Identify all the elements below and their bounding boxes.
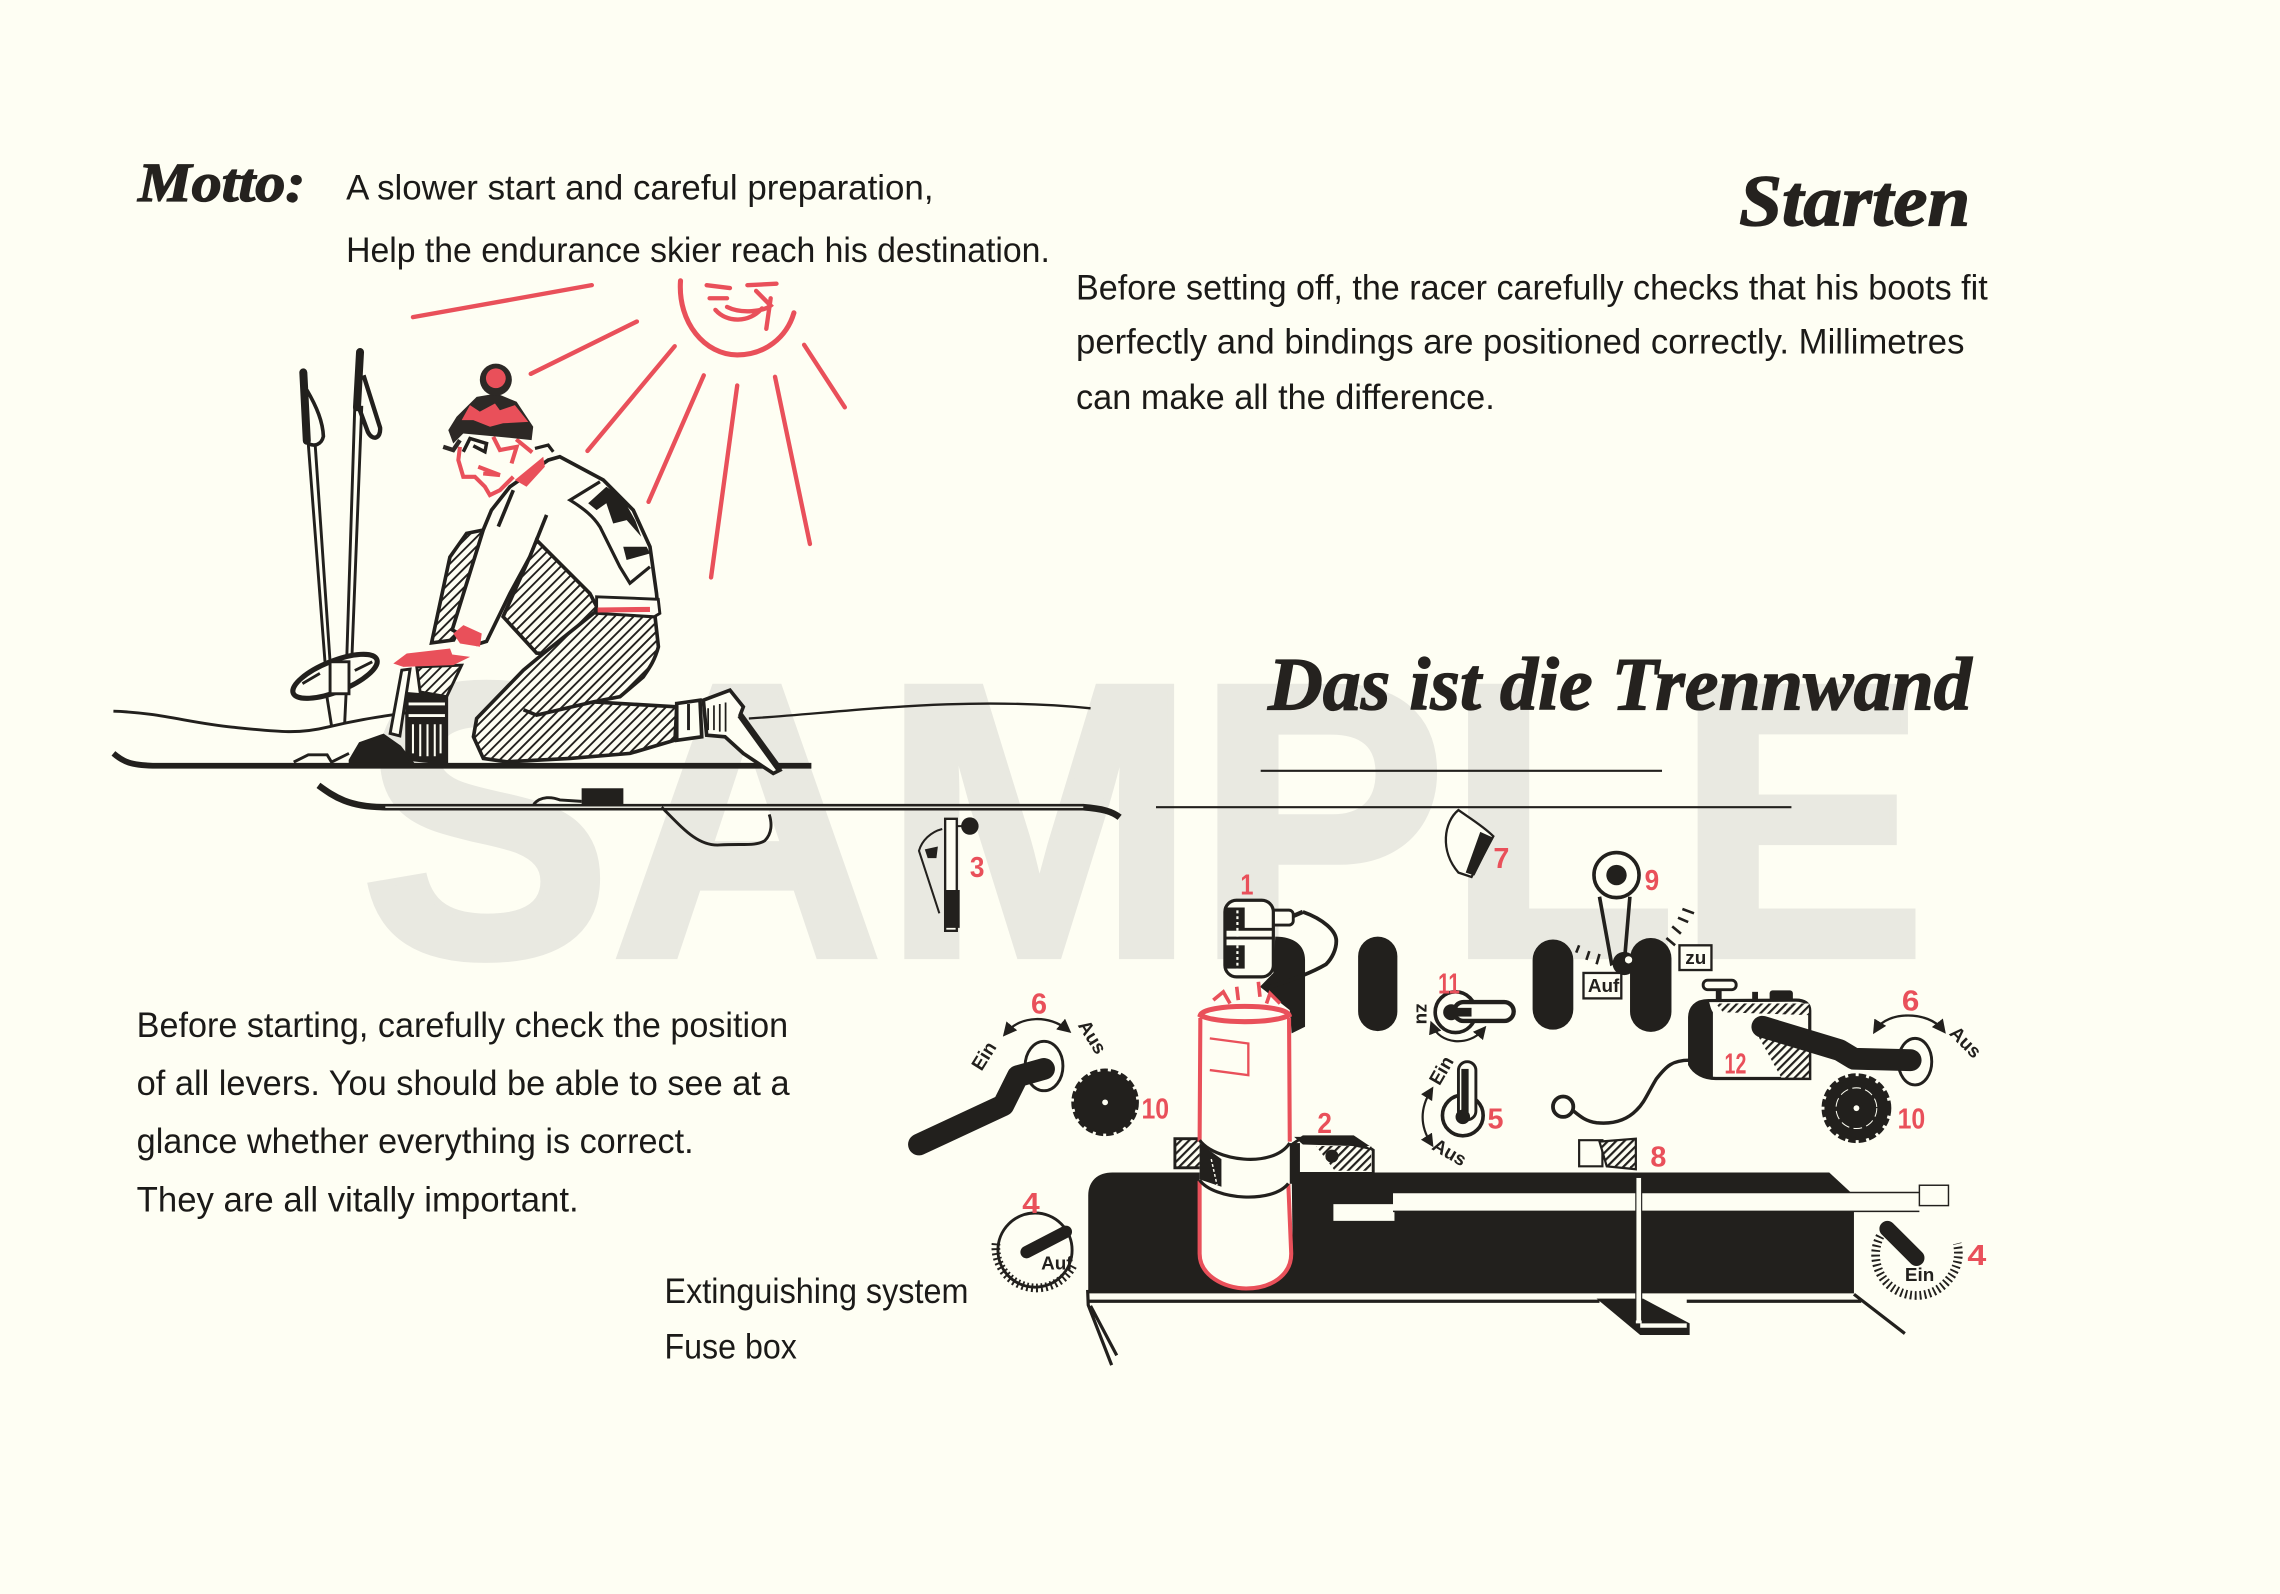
item 8: hinge: 8 xyxy=(1650,1141,1666,1173)
heading: Motto: Motto: xyxy=(137,152,305,213)
item 9: damper lever: zu xyxy=(1685,948,1706,969)
item 12: fuel tank xyxy=(1553,980,1810,1123)
item 4 right: dial xyxy=(1876,1215,1987,1295)
illustration: skis xyxy=(113,753,1120,845)
brow and eye xyxy=(463,438,487,452)
text block: legend: Extinguishing system xyxy=(665,1272,968,1311)
arm fold xyxy=(498,490,547,540)
sock and rear boot xyxy=(677,690,780,773)
item 11: lever: 11 xyxy=(1438,968,1460,1000)
item 5: lever: Aus xyxy=(1428,1135,1470,1171)
text block: motto: Help the endurance skier reach his destination. xyxy=(346,231,1050,270)
item 8: hinge xyxy=(1579,1139,1666,1173)
item 10 right: knob: 10 xyxy=(1898,1104,1925,1136)
machine body xyxy=(1088,1172,1948,1365)
heading: Starten: Starten xyxy=(1739,161,1970,242)
item 3: small lever xyxy=(919,817,984,931)
item 10 left: knob xyxy=(1074,1071,1169,1134)
bib number xyxy=(570,482,650,583)
item 7: flap: 7 xyxy=(1493,843,1509,875)
text block: before starting: They are all vitally important. xyxy=(137,1180,579,1219)
item 4 left: dial: 4 xyxy=(1022,1188,1041,1220)
item 9: damper lever: Auf xyxy=(1588,976,1620,997)
illustration: sun xyxy=(413,281,845,577)
item 7: flap xyxy=(1446,810,1509,877)
text block: before setting off: can make all the difference. xyxy=(1076,378,1495,417)
item 4 right: dial: Ein xyxy=(1905,1265,1934,1286)
collar tip xyxy=(535,445,553,452)
item 11: lever xyxy=(1411,968,1514,1041)
item 6 left: ignition lever: 6 xyxy=(1031,989,1047,1021)
text block: before starting: glance whether everything is correct. xyxy=(137,1122,694,1161)
text block: legend xyxy=(665,1272,968,1366)
scarf xyxy=(515,457,545,487)
item 4 left: dial: Auf xyxy=(1041,1254,1073,1275)
partition lines xyxy=(1156,771,1791,807)
illustration: snow line xyxy=(113,704,1091,732)
left bracket xyxy=(1175,1139,1201,1168)
item 6 right: lever: 6 xyxy=(1902,986,1919,1018)
item 12: fuel tank: 12 xyxy=(1725,1048,1746,1080)
item 6 right: lever: Aus xyxy=(1945,1023,1985,1063)
knee fold xyxy=(523,702,593,715)
belt xyxy=(597,597,660,617)
item 9: damper lever xyxy=(1576,853,1711,998)
item 4 right: dial: 4 xyxy=(1967,1240,1987,1272)
trousers xyxy=(473,612,677,762)
text block: before setting off: perfectly and bindings are positioned correctly. Millimetres xyxy=(1076,323,1964,362)
front boot xyxy=(350,665,462,764)
illustration: skier xyxy=(350,364,780,773)
mitten and glove xyxy=(393,625,482,667)
text block: before setting off: Before setting off, the racer carefully checks that his boots fit xyxy=(1076,269,1988,308)
item 6 left: ignition lever: Aus xyxy=(1073,1017,1110,1058)
text block: motto: A slower start and careful preparation, xyxy=(346,168,934,207)
item 1: extinguisher head xyxy=(1225,869,1336,987)
item 6 right: lever xyxy=(1762,986,1985,1085)
extinguisher cylinder xyxy=(1200,982,1300,1288)
text block: legend: Fuse box xyxy=(665,1327,797,1366)
item 3: small lever: 3 xyxy=(970,852,984,884)
wall slots xyxy=(1260,937,1671,1033)
hat xyxy=(443,393,533,450)
item 5: lever: Ein xyxy=(1426,1053,1459,1089)
torso hatch xyxy=(503,540,597,653)
item 2: bracket xyxy=(1293,1108,1373,1173)
text block: motto xyxy=(346,168,1050,270)
illustration: ski poles xyxy=(288,352,383,726)
item 6 left: ignition lever xyxy=(919,989,1110,1145)
item 10 left: knob: 10 xyxy=(1141,1093,1169,1125)
item 5: lever xyxy=(1423,1053,1504,1171)
text block: before starting: Before starting, carefully check the position xyxy=(137,1006,788,1045)
item 1: extinguisher head: 1 xyxy=(1240,869,1253,901)
back arm xyxy=(432,530,491,643)
item 11: lever: zu xyxy=(1411,1003,1432,1024)
jersey xyxy=(452,457,658,644)
item 9: damper lever: 9 xyxy=(1645,865,1659,897)
text block: before setting off xyxy=(1076,269,1988,417)
text block: before starting xyxy=(137,1006,790,1219)
item 6 left: ignition lever: Ein xyxy=(968,1038,1001,1074)
item 4 left: dial xyxy=(996,1188,1073,1288)
face xyxy=(458,437,532,495)
pompon xyxy=(480,364,512,396)
item 10 right: knob xyxy=(1824,1076,1925,1140)
watermark: SAMPLE: SAMPLE xyxy=(361,602,1927,1038)
text block: before starting: of all levers. You should be able to see at a xyxy=(137,1064,790,1103)
heading: Das ist die Trennwand: Das ist die Trennwand xyxy=(1267,644,1973,727)
item 5: lever: 5 xyxy=(1488,1104,1504,1136)
item 2: bracket: 2 xyxy=(1317,1108,1332,1140)
